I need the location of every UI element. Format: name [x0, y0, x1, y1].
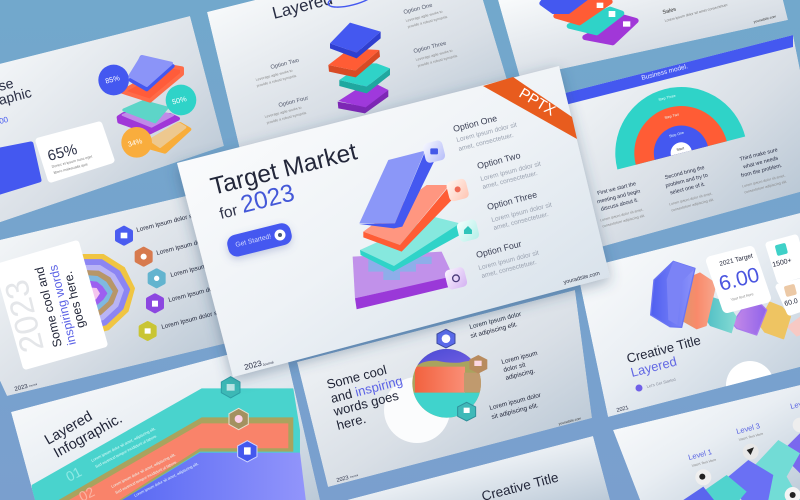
- target card: Your text here: [730, 292, 754, 302]
- target card: [711, 251, 766, 308]
- inner arc: [654, 126, 708, 160]
- heading: Infographic.: [51, 411, 125, 461]
- option one: [452, 113, 518, 153]
- footer logo: Journal: [349, 473, 359, 479]
- panel: left words slide: [0, 195, 240, 396]
- panel: top left stats slide: [0, 16, 224, 224]
- right text blocks: [469, 311, 543, 421]
- level labels: Insert Text Here: [738, 432, 764, 442]
- column two: Lorem ipsum dolor sit amet,: [669, 192, 713, 207]
- cube blue left: [683, 487, 717, 500]
- bottom hex: [458, 402, 476, 421]
- layered ball: [407, 343, 487, 420]
- footer logo: 2023: [336, 475, 349, 484]
- column one: discuss about it.: [600, 197, 639, 213]
- stat card white: [39, 125, 111, 179]
- layer blue: [542, 0, 588, 12]
- card 1500+: 1500+: [772, 257, 793, 269]
- purple layer: [338, 83, 388, 113]
- column two: problem and try to: [665, 173, 709, 189]
- heading: Layered: [629, 354, 678, 380]
- level labels: [687, 398, 800, 468]
- 3d layers chart: [353, 140, 480, 309]
- options text: Option Three: [413, 41, 447, 55]
- option four: [475, 239, 540, 280]
- prism teal: [704, 296, 737, 333]
- list icons: [117, 227, 164, 339]
- button one: [695, 469, 711, 485]
- layer blue: [130, 57, 173, 89]
- panel: top center layered slide: [207, 0, 510, 150]
- sales text: Sales: [662, 7, 677, 16]
- options text: provide a robust synopsis: [266, 111, 307, 125]
- knob hex: [437, 329, 455, 348]
- stat card white: libero malesuada quis: [53, 162, 88, 175]
- button: Get Started: [225, 221, 294, 258]
- outer arc: [615, 87, 746, 170]
- column one: Lorem ipsum dolor sit amet,: [600, 208, 644, 223]
- footer logo: [336, 473, 359, 484]
- right text blocks: Lorem Ipsum dolor: [469, 311, 523, 331]
- option two: Option Two: [476, 150, 522, 171]
- icon centers: [121, 233, 159, 334]
- layer coral: [556, 0, 610, 23]
- options text: provide a robust synopsis: [407, 15, 448, 29]
- prism blue facet: [667, 261, 695, 325]
- column one: consectetuer adipiscing elit.: [602, 214, 646, 228]
- option one: amet, consectetuer.: [458, 132, 515, 153]
- footer logo: Journal: [262, 360, 274, 367]
- teal layer: [339, 63, 390, 93]
- options text: Option Four: [278, 95, 309, 109]
- list labels: Lorem Ipsum dolor sit: [170, 257, 230, 279]
- prism yellow: [759, 303, 790, 338]
- card 1500+: [769, 238, 800, 280]
- vertical headline: Some cool and: [32, 265, 65, 349]
- step labels: Step Two: [664, 112, 680, 120]
- panel: main target market slide: [177, 66, 610, 377]
- hex coral: [136, 248, 151, 265]
- layer coral: [122, 66, 182, 101]
- options text: Leverage agile works to: [405, 10, 443, 23]
- footer logo: 2021: [616, 405, 629, 414]
- options text: [255, 3, 458, 125]
- option two: amet, consectetuer.: [482, 170, 539, 191]
- heading: here.: [335, 411, 367, 433]
- option three: [486, 189, 553, 232]
- right text blocks: adipiscing.: [505, 368, 536, 382]
- band text: Lorem ipsum dolor sit amet, adipiscing elit.: [111, 453, 176, 489]
- button three: [785, 487, 800, 500]
- hex teal: [221, 377, 240, 398]
- step labels: [658, 95, 684, 151]
- step labels: Start: [676, 146, 684, 152]
- sales text: Lorem ipsum dolor sit amet consectetuer: [664, 3, 729, 23]
- blue layer: [330, 23, 381, 58]
- hex tan: [229, 408, 248, 430]
- right text blocks: sit adipiscing elit.: [470, 321, 518, 340]
- badge 34%: 34%: [127, 136, 144, 149]
- list labels: Lorem Ipsum dolor sit: [168, 282, 228, 304]
- panel: bottom creative title slide: [347, 436, 610, 500]
- level labels: Level 3: [735, 421, 761, 436]
- badge 50%: 50%: [171, 94, 188, 106]
- teal layer: [360, 217, 460, 272]
- hex purple: [148, 295, 162, 312]
- title: 2023: [238, 179, 297, 219]
- right text blocks: Lorem ipsum dolor: [489, 392, 543, 412]
- footer logo: [243, 359, 274, 372]
- icon tile four: [444, 266, 468, 290]
- prism pink: [787, 317, 800, 337]
- panel: creative title layered slide: [577, 213, 800, 417]
- stat card blue: [0, 144, 39, 195]
- step labels: Step One: [669, 131, 684, 138]
- heading: Some cool: [325, 362, 388, 392]
- right text blocks: sit adipiscing elit.: [491, 402, 539, 421]
- site label: youradsite.com: [753, 14, 777, 24]
- icon tile three: [456, 219, 480, 243]
- button: Get Started: Get Started!: [235, 233, 272, 249]
- button four: [793, 418, 800, 432]
- decorative white circle: [384, 377, 450, 443]
- header band: [565, 35, 793, 105]
- teal band: [32, 388, 300, 500]
- list labels: Lorem Ipsum dolor sit: [161, 309, 221, 331]
- column three: from the problem.: [741, 163, 783, 179]
- option one: Option One: [452, 113, 498, 134]
- column two: [664, 165, 715, 212]
- title: for: [218, 202, 240, 223]
- layer orange: [149, 123, 189, 152]
- options text: Leverage agile works to: [255, 69, 293, 82]
- band text: [91, 427, 199, 498]
- hex blue: [117, 227, 131, 244]
- column two: select one of it.: [669, 182, 706, 196]
- stat card white: Donec et ipsum nunc eget: [51, 155, 93, 169]
- layer teal: [124, 102, 167, 122]
- cube blue: [728, 460, 773, 500]
- purple base: [353, 252, 453, 309]
- coral layer: [363, 185, 453, 252]
- list labels: Lorem Ipsum dolor sit: [136, 212, 196, 234]
- green edge band: [50, 417, 293, 500]
- layer purple: [119, 108, 178, 132]
- header text: Business model.: [641, 63, 689, 82]
- option two: Lorem ipsum dolor sit: [480, 161, 542, 183]
- content card: [0, 244, 104, 366]
- options text: provide a robust synopsis: [417, 54, 458, 68]
- column one: First we start the: [597, 181, 637, 197]
- get started: [636, 377, 676, 392]
- level labels: Insert Text Here: [691, 458, 717, 468]
- site label: youradsite.com: [563, 271, 601, 286]
- coral band: [63, 423, 288, 500]
- ribbon: PPTX: PPTX: [516, 85, 558, 120]
- column three: consectetuer adipiscing elit.: [744, 180, 788, 194]
- column two: Second bring the: [664, 165, 705, 181]
- list labels: Lorem Ipsum dolor sit: [156, 235, 216, 257]
- hex yellow: [140, 323, 155, 339]
- heading: Layered: [42, 408, 95, 448]
- band text: Lorem ipsum dolor sit amet, adipiscing elit.: [134, 462, 199, 498]
- prism coral: [677, 272, 717, 329]
- option four: Option Four: [475, 239, 523, 260]
- layer teal: [569, 9, 622, 33]
- blue layer: [359, 151, 434, 228]
- option three: amet, consectetuer.: [493, 211, 550, 232]
- footer logo: 2023: [14, 384, 29, 393]
- panel: business model slide: [565, 35, 800, 250]
- number 01: 01: [63, 463, 84, 485]
- option one: Lorem ipsum dolor sit: [456, 122, 518, 144]
- panel: layered infographic slide: [11, 340, 320, 500]
- list labels: [136, 212, 230, 331]
- get started: Let's Get Started: [646, 377, 676, 389]
- option four: Lorem ipsum dolor sit: [478, 250, 540, 272]
- option three: Lorem ipsum dolor sit: [491, 202, 553, 224]
- card 60.0: 60.0: [784, 298, 799, 308]
- column two: consectetuer adipiscing elit.: [671, 198, 715, 212]
- options text: Leverage agile works to: [415, 49, 453, 62]
- blue band: [117, 453, 307, 500]
- hex blue: [238, 441, 257, 462]
- white half circle: [726, 361, 774, 409]
- options text: Leverage agile works to: [264, 106, 302, 119]
- layer purple: [585, 17, 636, 43]
- heading: [325, 362, 404, 433]
- icon tile two: [446, 178, 470, 202]
- option three: Option Three: [486, 189, 538, 212]
- right hex: [469, 355, 487, 374]
- heading: and inspiring: [329, 373, 404, 406]
- concentric layers chart: [67, 255, 134, 334]
- icon tile one: [422, 140, 446, 164]
- right text blocks: dolor sit: [503, 362, 526, 374]
- title: Target Market: [208, 138, 360, 201]
- hex icons: [227, 384, 251, 455]
- panel: level slide: [613, 385, 800, 500]
- band text: Sed eiusmod tempor incididunt ut labore.: [115, 460, 178, 495]
- footer logo: 2023: [243, 359, 263, 372]
- stacked layers chart: [98, 57, 196, 158]
- hex teal: [149, 270, 164, 287]
- prism purple: [732, 303, 767, 335]
- heading: words goes: [331, 388, 401, 419]
- icons: [597, 3, 630, 27]
- title fragment: [0, 80, 32, 124]
- button two: [743, 444, 759, 460]
- level labels: Level 1: [687, 447, 713, 462]
- column three: Lorem ipsum dolor sit amet,: [742, 174, 786, 189]
- right text blocks: Lorem ipsum: [501, 350, 538, 366]
- option two: [476, 150, 542, 191]
- start arc: [670, 142, 692, 156]
- footer logo: Journal: [28, 382, 38, 388]
- column one: [597, 181, 646, 228]
- step labels: Step Three: [658, 94, 676, 102]
- heading: Creative Title: [625, 332, 702, 366]
- rounded layers: [542, 0, 636, 43]
- panel: some cool words slide: [297, 290, 592, 487]
- column three: [739, 147, 788, 194]
- options text: provide a robust synopsis: [256, 74, 297, 88]
- vertical headline: inspiring words: [46, 264, 79, 347]
- options text: Option One: [403, 3, 433, 16]
- cube purple right: [780, 433, 800, 473]
- stat card white: 65%: [46, 141, 79, 165]
- options text: Option Two: [270, 58, 300, 71]
- option four: amet, consectetuer.: [481, 259, 538, 280]
- band text: Lorem ipsum dolor sit amet, adipiscing elit.: [91, 427, 156, 463]
- cube teal left: [705, 475, 747, 500]
- target card: 6.00: [716, 263, 762, 296]
- footer logo: [14, 382, 38, 393]
- 3d stack: [328, 23, 390, 113]
- semicircle layers: [615, 87, 746, 170]
- band text: Sed eiusmod tempor incididunt ut labore.: [95, 434, 158, 469]
- card 60.0: [779, 282, 800, 312]
- target card: 2021 Target: [719, 253, 754, 268]
- column three: what we needs: [742, 156, 779, 171]
- column one: meeting and begin: [597, 189, 641, 205]
- heading scribble: [328, 0, 368, 8]
- coral layer: [328, 48, 380, 77]
- vertical headline: goes here.: [61, 270, 88, 330]
- ribbon: PPTX: [483, 77, 577, 139]
- column three: Third make sure: [739, 147, 778, 163]
- badge 85%: 85%: [104, 73, 121, 86]
- prism blue: [651, 261, 695, 327]
- site label: youradsite.com: [558, 416, 582, 426]
- vertical headline: [32, 264, 88, 349]
- middle arc: [634, 106, 727, 165]
- cube teal right: [755, 440, 800, 500]
- panel: top right slide: [498, 0, 788, 78]
